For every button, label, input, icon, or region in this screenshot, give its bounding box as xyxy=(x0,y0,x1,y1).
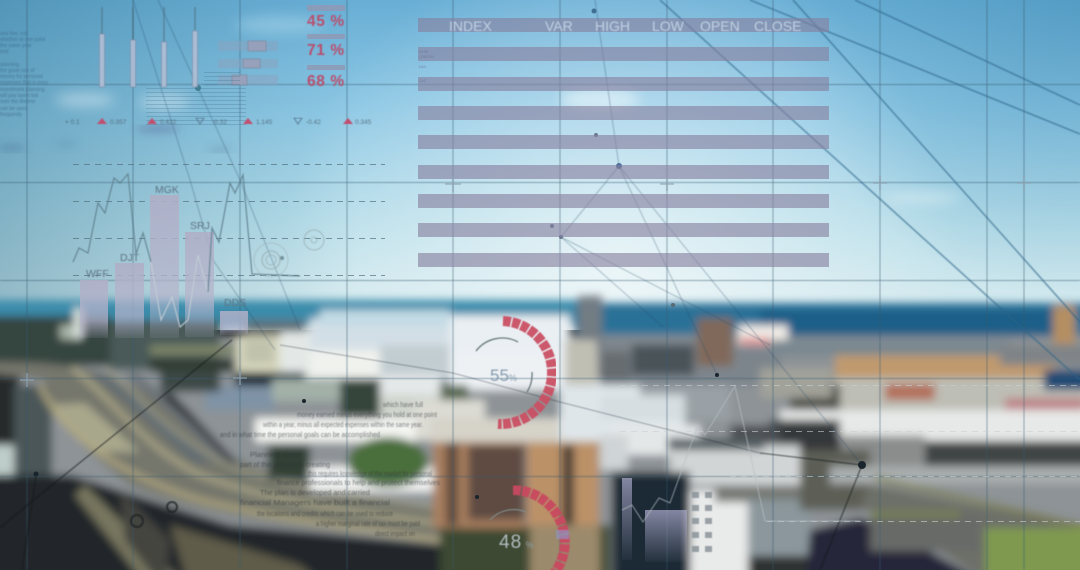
ticker row: -0.32 xyxy=(212,119,227,126)
ticker row: + 0.1 xyxy=(65,119,80,126)
data table header and rows xyxy=(418,18,829,267)
ticker row: 1.145 xyxy=(256,119,273,126)
article text block: money earned minus everything you hold at one point xyxy=(297,412,437,419)
side text block: will pay taxes but xyxy=(0,93,39,99)
lower right bars xyxy=(622,478,687,562)
ticker row: -0.42 xyxy=(306,119,321,126)
article text block: finance professionals to help and protect themselves xyxy=(277,480,440,487)
side text block: the same year xyxy=(0,43,32,49)
table row labels: DAX xyxy=(419,65,427,69)
side text block: can be used xyxy=(0,106,27,112)
ring gauge 48 percent xyxy=(490,490,569,570)
article text block: part of this process is creating xyxy=(240,462,330,469)
percentage stats: 45 % xyxy=(307,13,345,30)
candlestick chart xyxy=(100,7,198,87)
percentage stats xyxy=(307,5,345,90)
sliders xyxy=(218,41,278,85)
dark network lines xyxy=(0,340,862,570)
brown buildings xyxy=(433,440,525,528)
article text block: The plan is developed and carried xyxy=(260,490,370,497)
white areas and tree xyxy=(255,418,415,442)
ticker row xyxy=(65,118,372,126)
network nodes xyxy=(34,8,866,499)
base of the city xyxy=(0,335,1080,570)
article text block: within a year, minus all expected expenses within the same year. xyxy=(262,422,423,429)
ring gauge 55 percent xyxy=(476,321,552,424)
table column headings: INDEX xyxy=(449,18,492,34)
article text block: this requires knowledge of the market for personal xyxy=(308,471,432,478)
blurred reflection marks xyxy=(0,126,232,152)
crosshair markers xyxy=(20,176,1031,387)
table column headings xyxy=(449,18,801,34)
article text block: direct impact on xyxy=(375,531,415,538)
faint network line across the city xyxy=(280,345,760,453)
table row labels: LONDON xyxy=(419,55,434,59)
side text block: frequently xyxy=(0,112,22,118)
line chart xyxy=(73,174,300,327)
side text block: the good use of xyxy=(0,68,35,74)
ticker row: 0.422 xyxy=(160,119,177,126)
heavy network lines top right xyxy=(660,0,1080,380)
low foreground xyxy=(440,525,610,570)
bar chart: DJT xyxy=(120,252,140,264)
striped data block xyxy=(146,72,246,124)
dashed guide lines right xyxy=(620,386,1080,522)
article text block: financial Managers have built a financial xyxy=(240,500,391,507)
small wheel icons xyxy=(131,502,177,527)
article text block xyxy=(220,402,440,538)
side text block: over the lifetime xyxy=(0,99,36,105)
lower right line chart xyxy=(622,386,860,522)
table column headings: LOW xyxy=(652,18,685,34)
sea strip xyxy=(0,300,580,326)
bar chart: WFF xyxy=(86,268,109,280)
side text block: money for personal xyxy=(0,74,43,80)
ticker row: 0.345 xyxy=(355,119,372,126)
bar chart: MGK xyxy=(155,184,179,196)
percentage stats: 71 % xyxy=(307,42,345,59)
table column headings: HIGH xyxy=(595,18,630,34)
article text block: a higher marginal rate of tax must be paid xyxy=(316,521,420,528)
side text block xyxy=(0,31,49,118)
article text block: and in what time the personal goals can be accomplished xyxy=(220,432,380,439)
side text block: whether at one point xyxy=(0,37,46,43)
bar chart: DDS xyxy=(224,297,246,309)
side text block: planning xyxy=(0,62,19,68)
bar chart: SRJ xyxy=(190,220,210,232)
table row labels: NYSE xyxy=(419,50,429,54)
road xyxy=(0,362,450,540)
side text block: and five, not xyxy=(0,31,28,37)
target icons xyxy=(254,230,324,277)
article text block: the locations and credits which can be used to reduce xyxy=(257,511,393,518)
table row labels: CAC xyxy=(419,79,427,83)
dark lower ground xyxy=(0,475,450,570)
ring gauge 48 percent: 48 % xyxy=(499,532,535,553)
ticker row: 0.357 xyxy=(110,119,127,126)
ring gauge 55 percent: 55% xyxy=(490,366,517,385)
article text block: Planning when xyxy=(250,452,300,459)
central and right city xyxy=(560,380,685,440)
percentage stats: 68 % xyxy=(307,73,345,90)
article text block: which have full xyxy=(382,402,423,409)
network lines xyxy=(133,0,862,465)
side text block: end xyxy=(0,49,9,55)
side text block: expenses that is easy xyxy=(0,80,49,86)
dashed guide lines xyxy=(73,164,385,276)
table column headings: VAR xyxy=(545,18,573,34)
left ground xyxy=(0,372,20,482)
table column headings: OPEN xyxy=(700,18,740,34)
table row labels xyxy=(419,50,434,83)
side text block: investment planning xyxy=(0,87,45,93)
bar chart xyxy=(80,184,248,338)
table column headings: CLOSE xyxy=(754,18,801,34)
